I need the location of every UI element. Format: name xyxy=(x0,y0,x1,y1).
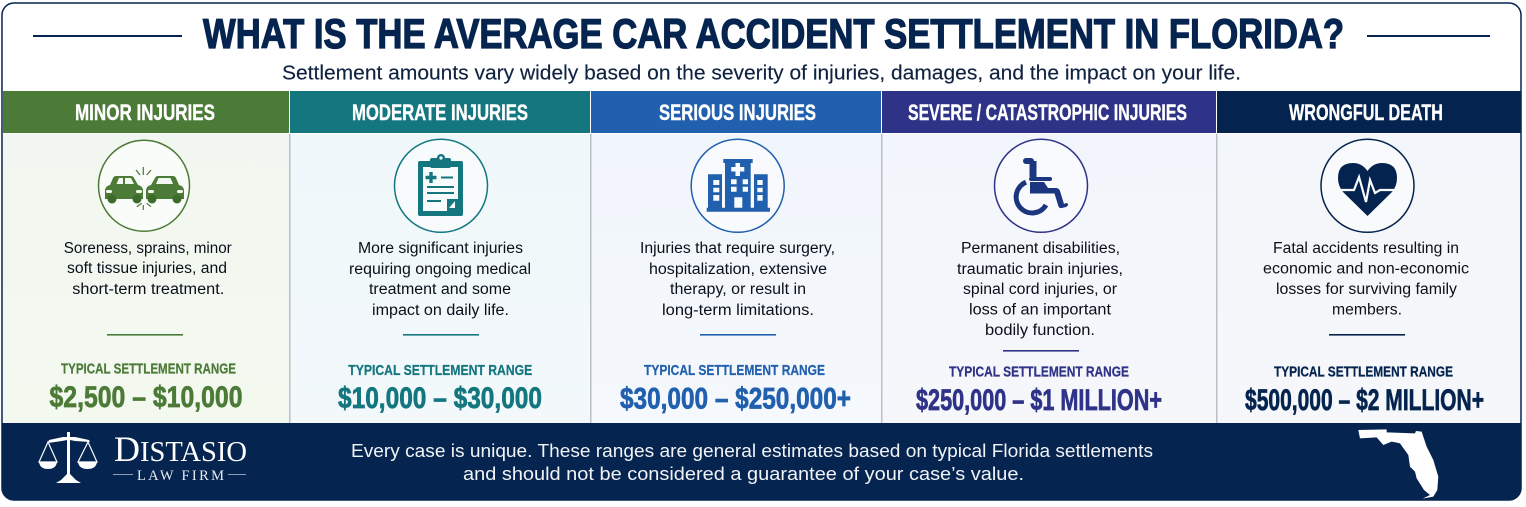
description: Fatal accidents resulting in xyxy=(1273,240,1459,257)
settlement range xyxy=(50,360,242,414)
description: More significant injuries xyxy=(358,240,523,257)
settlement range: TYPICAL SETTLEMENT RANGE xyxy=(348,362,532,379)
header: serious injuries xyxy=(591,91,881,133)
icon: car collision xyxy=(98,140,190,231)
subtitle: Settlement amounts vary widely based on the severity of injuries, damages, and the impact on your life. xyxy=(282,62,1241,84)
icon: hospital xyxy=(691,139,784,232)
footer note: and should not be considered a guarantee of your case’s value. xyxy=(463,464,1024,484)
logo: Distasio Law Firm xyxy=(39,429,247,484)
settlement range: $30,000 – $250,000+ xyxy=(620,382,851,416)
description: losses for surviving family xyxy=(1276,281,1457,298)
description: loss of an important xyxy=(969,302,1112,318)
description: Soreness, sprains, minor xyxy=(64,240,232,257)
description: bodily function. xyxy=(985,322,1095,339)
settlement range xyxy=(916,364,1162,417)
settlement range: $10,000 – $30,000 xyxy=(338,382,542,415)
settlement range: $2,500 – $10,000 xyxy=(50,381,242,414)
description xyxy=(1263,240,1469,318)
description: impact on daily life. xyxy=(372,302,509,319)
header: wrongful death: WRONGFUL DEATH xyxy=(1289,100,1443,125)
wordmark: DISTASIO xyxy=(114,429,247,469)
settlement range xyxy=(338,362,542,415)
description: members. xyxy=(1332,302,1402,318)
description: long-term limitations. xyxy=(662,302,814,319)
description xyxy=(64,242,232,294)
description: treatment and some xyxy=(369,281,511,298)
settlement range: TYPICAL SETTLEMENT RANGE xyxy=(1274,364,1453,380)
description: Permanent disabilities, xyxy=(961,240,1120,257)
wordmark: LAW FIRM xyxy=(137,468,224,484)
header: minor injuries xyxy=(3,91,289,133)
header: moderate injuries: MODERATE INJURIES xyxy=(352,100,528,125)
settlement range: TYPICAL SETTLEMENT RANGE xyxy=(61,360,236,378)
panel: moderate injuries xyxy=(290,91,590,423)
header: minor injuries: MINOR INJURIES xyxy=(75,100,215,125)
panel: severe catastrophic injuries xyxy=(882,91,1216,423)
description: Injuries that require surgery, xyxy=(640,240,835,257)
header: moderate injuries xyxy=(290,91,590,133)
description: hospitalization, extensive xyxy=(649,261,827,278)
description xyxy=(349,240,531,319)
header: severe catastrophic injuries xyxy=(882,91,1216,133)
icon: wheelchair xyxy=(994,139,1088,232)
wordmark xyxy=(113,438,246,480)
footer band xyxy=(2,423,1521,500)
description: economic and non-economic xyxy=(1263,260,1469,278)
description: spinal cord injuries, or xyxy=(963,281,1117,298)
description: therapy, or result in xyxy=(670,281,806,298)
footer note: Every case is unique. These ranges are general estimates based on typical Florida settlements xyxy=(351,441,1153,461)
description xyxy=(957,240,1123,339)
panel: minor injuries xyxy=(3,91,289,423)
description: soft tissue injuries, and xyxy=(67,260,227,277)
settlement range xyxy=(1245,364,1484,417)
panel: wrongful death xyxy=(1217,91,1521,423)
header: severe catastrophic injuries: SEVERE / CATASTROPHIC INJURIES xyxy=(908,100,1187,125)
header: wrongful death xyxy=(1217,91,1521,133)
icon: scales of justice xyxy=(39,432,97,483)
panel: serious injuries xyxy=(591,91,881,423)
icon: Florida map xyxy=(1358,429,1438,499)
settlement range: TYPICAL SETTLEMENT RANGE xyxy=(644,362,825,379)
description: requiring ongoing medical xyxy=(349,261,531,278)
settlement range: $250,000 – $1 MILLION+ xyxy=(916,384,1162,417)
header: serious injuries: SERIOUS INJURIES xyxy=(659,100,816,125)
settlement range: TYPICAL SETTLEMENT RANGE xyxy=(949,364,1129,380)
footer note xyxy=(351,441,1153,484)
description xyxy=(640,240,835,319)
description: traumatic brain injuries, xyxy=(957,261,1123,278)
settlement range xyxy=(620,362,851,416)
icon: clipboard xyxy=(394,139,488,232)
icon: heart with pulse xyxy=(1321,139,1414,232)
description: short-term treatment. xyxy=(72,281,224,298)
